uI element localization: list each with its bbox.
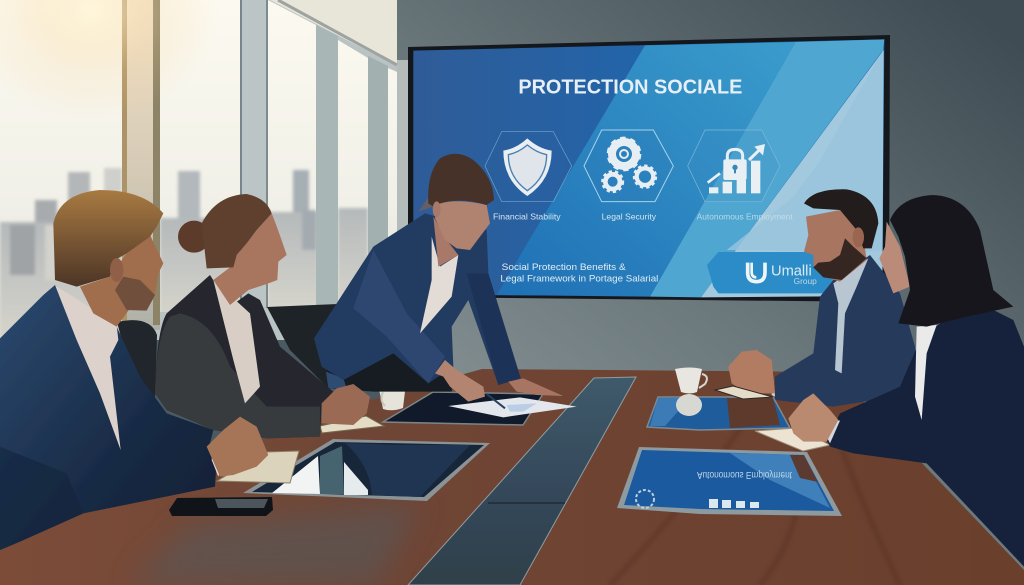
document and pen: [448, 394, 577, 417]
slide subtitle: Legal Framework in Portage Salarial: [500, 274, 658, 284]
left notebook, front: [217, 451, 299, 483]
right woman: [788, 195, 1024, 567]
icon: gears in hexagon: [584, 130, 673, 202]
icon captions: [493, 211, 793, 221]
window mullions: [122, 0, 408, 330]
logo panel: Umalli Group: Umalli: [771, 263, 812, 279]
left notebook, back: [320, 416, 384, 433]
icon: shield in hexagon: [485, 132, 572, 202]
background wall: [397, 0, 1024, 585]
logo panel: Umalli Group: Group: [794, 276, 817, 286]
presentation screen: [408, 35, 890, 302]
windows with city view: [0, 0, 408, 342]
left chair backs: [117, 304, 338, 400]
right tablet, front: [617, 447, 842, 516]
left tablet, front: [243, 439, 490, 501]
left tablet, back: [383, 392, 543, 425]
slide subtitle: Social Protection Benefits &: [502, 262, 627, 272]
logo panel: Umalli Group: [707, 252, 838, 293]
slide subtitle: [500, 262, 658, 284]
right notebooks: [715, 386, 830, 451]
left man: [0, 190, 268, 550]
phone: [169, 497, 273, 516]
right tablet, back: [647, 394, 790, 430]
icon captions: Legal Security: [602, 211, 657, 221]
icon: padlock and growth chart in hexagon: [688, 130, 780, 202]
reflected text on tablet: Autonomous Employment: [697, 469, 792, 480]
left woman: [155, 194, 370, 438]
slide title: PROTECTION SOCIALE: [518, 76, 742, 98]
window light glare: [0, 0, 220, 120]
icon captions: Financial Stability: [493, 211, 561, 221]
conference table: [0, 369, 1024, 585]
right coffee cup: [675, 368, 707, 394]
presenter: [314, 154, 577, 417]
screen background panels: [413, 39, 884, 297]
left coffee cup: [378, 381, 406, 410]
glass centre strip: [408, 377, 636, 585]
icon captions: Autonomous Employment: [697, 211, 793, 221]
right man: [728, 189, 917, 407]
